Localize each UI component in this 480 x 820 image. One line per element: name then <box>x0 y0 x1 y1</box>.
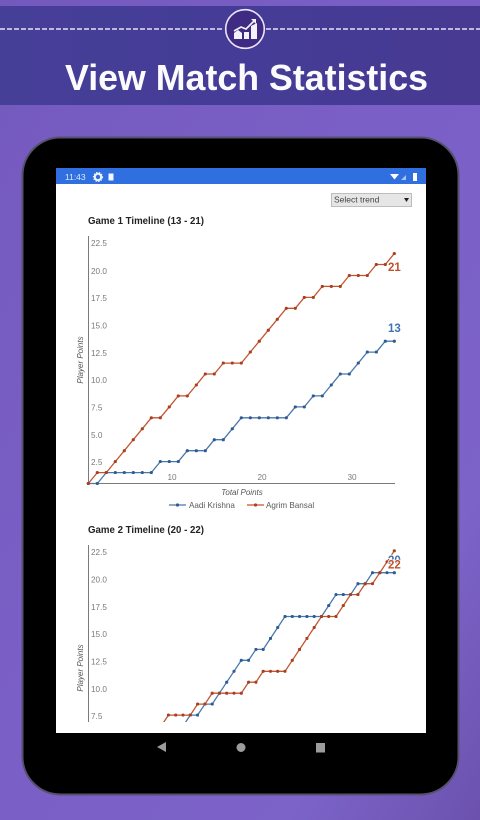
icon: growth chart badge <box>226 10 264 48</box>
end label blue: 13 <box>388 323 401 335</box>
dropdown: select trend <box>332 194 412 206</box>
y axis ticks: 7.5 <box>91 404 103 412</box>
tablet body <box>22 138 458 794</box>
y axis ticks: 12.5 <box>91 349 107 358</box>
series: Aadi Krishna <box>88 341 394 484</box>
header band <box>0 6 480 105</box>
y axis ticks: 17.5 <box>91 294 107 303</box>
y axis ticks <box>91 548 107 721</box>
y axis title: Player Points <box>76 644 85 692</box>
legend: Aadi Krishna <box>189 501 235 510</box>
y axis ticks: 15.0 <box>91 322 107 330</box>
dropdown: select trend: Select trend <box>334 194 380 204</box>
x axis ticks: 20 <box>257 473 267 482</box>
icon: back <box>157 742 166 752</box>
y axis ticks: 20.0 <box>91 576 107 584</box>
x axis ticks: 30 <box>347 473 357 482</box>
icon: wifi <box>390 174 399 180</box>
y axis <box>88 545 90 722</box>
legend: Agrim Bansal <box>266 501 314 510</box>
y axis ticks: 22.5 <box>91 548 107 557</box>
icon: signal <box>401 175 406 180</box>
navigation bar <box>157 742 325 752</box>
chart: game 2 timeline <box>76 545 401 726</box>
y axis title: Player Points <box>76 336 85 384</box>
series group <box>161 551 394 726</box>
x axis ticks <box>167 473 357 482</box>
y axis ticks: 17.5 <box>91 603 107 612</box>
chart: game 1 timeline <box>76 236 401 510</box>
y axis ticks: 7.5 <box>91 712 103 721</box>
icon: battery <box>413 173 417 181</box>
y axis ticks: 2.5 <box>91 458 103 467</box>
y axis ticks: 10.0 <box>91 685 107 694</box>
series: Aadi Krishna <box>183 573 394 726</box>
x axis title: Total Points <box>221 488 263 497</box>
heading: game 1: Game 1 Timeline (13 - 21) <box>88 215 204 227</box>
x axis ticks: 10 <box>167 473 177 482</box>
end label blue: 20 <box>388 555 401 567</box>
y axis ticks: 5.0 <box>91 431 103 440</box>
screen <box>56 168 426 733</box>
y axis ticks: 12.5 <box>91 658 107 666</box>
status bar <box>56 168 426 184</box>
clock: 11:43 <box>65 172 86 182</box>
axes <box>88 236 395 484</box>
end label red: 21 <box>388 262 401 274</box>
icon: home <box>236 743 246 752</box>
y axis ticks: 20.0 <box>91 267 107 276</box>
icon: sd card <box>108 174 114 180</box>
dashed divider left and right <box>0 28 480 30</box>
y axis ticks: 10.0 <box>91 376 107 385</box>
y axis ticks <box>91 239 107 467</box>
legend <box>169 501 314 510</box>
icon: settings gear <box>93 172 103 182</box>
title: View Match Statistics <box>65 57 428 98</box>
icon: recents <box>316 743 325 752</box>
y axis ticks: 15.0 <box>91 630 107 639</box>
series: Agrim Bansal <box>88 254 394 484</box>
tablet device <box>22 138 458 794</box>
series: Agrim Bansal <box>161 551 394 726</box>
end label red: 22 <box>388 560 401 572</box>
heading: game 2: Game 2 Timeline (20 - 22) <box>88 524 204 536</box>
y axis ticks: 22.5 <box>91 239 107 248</box>
